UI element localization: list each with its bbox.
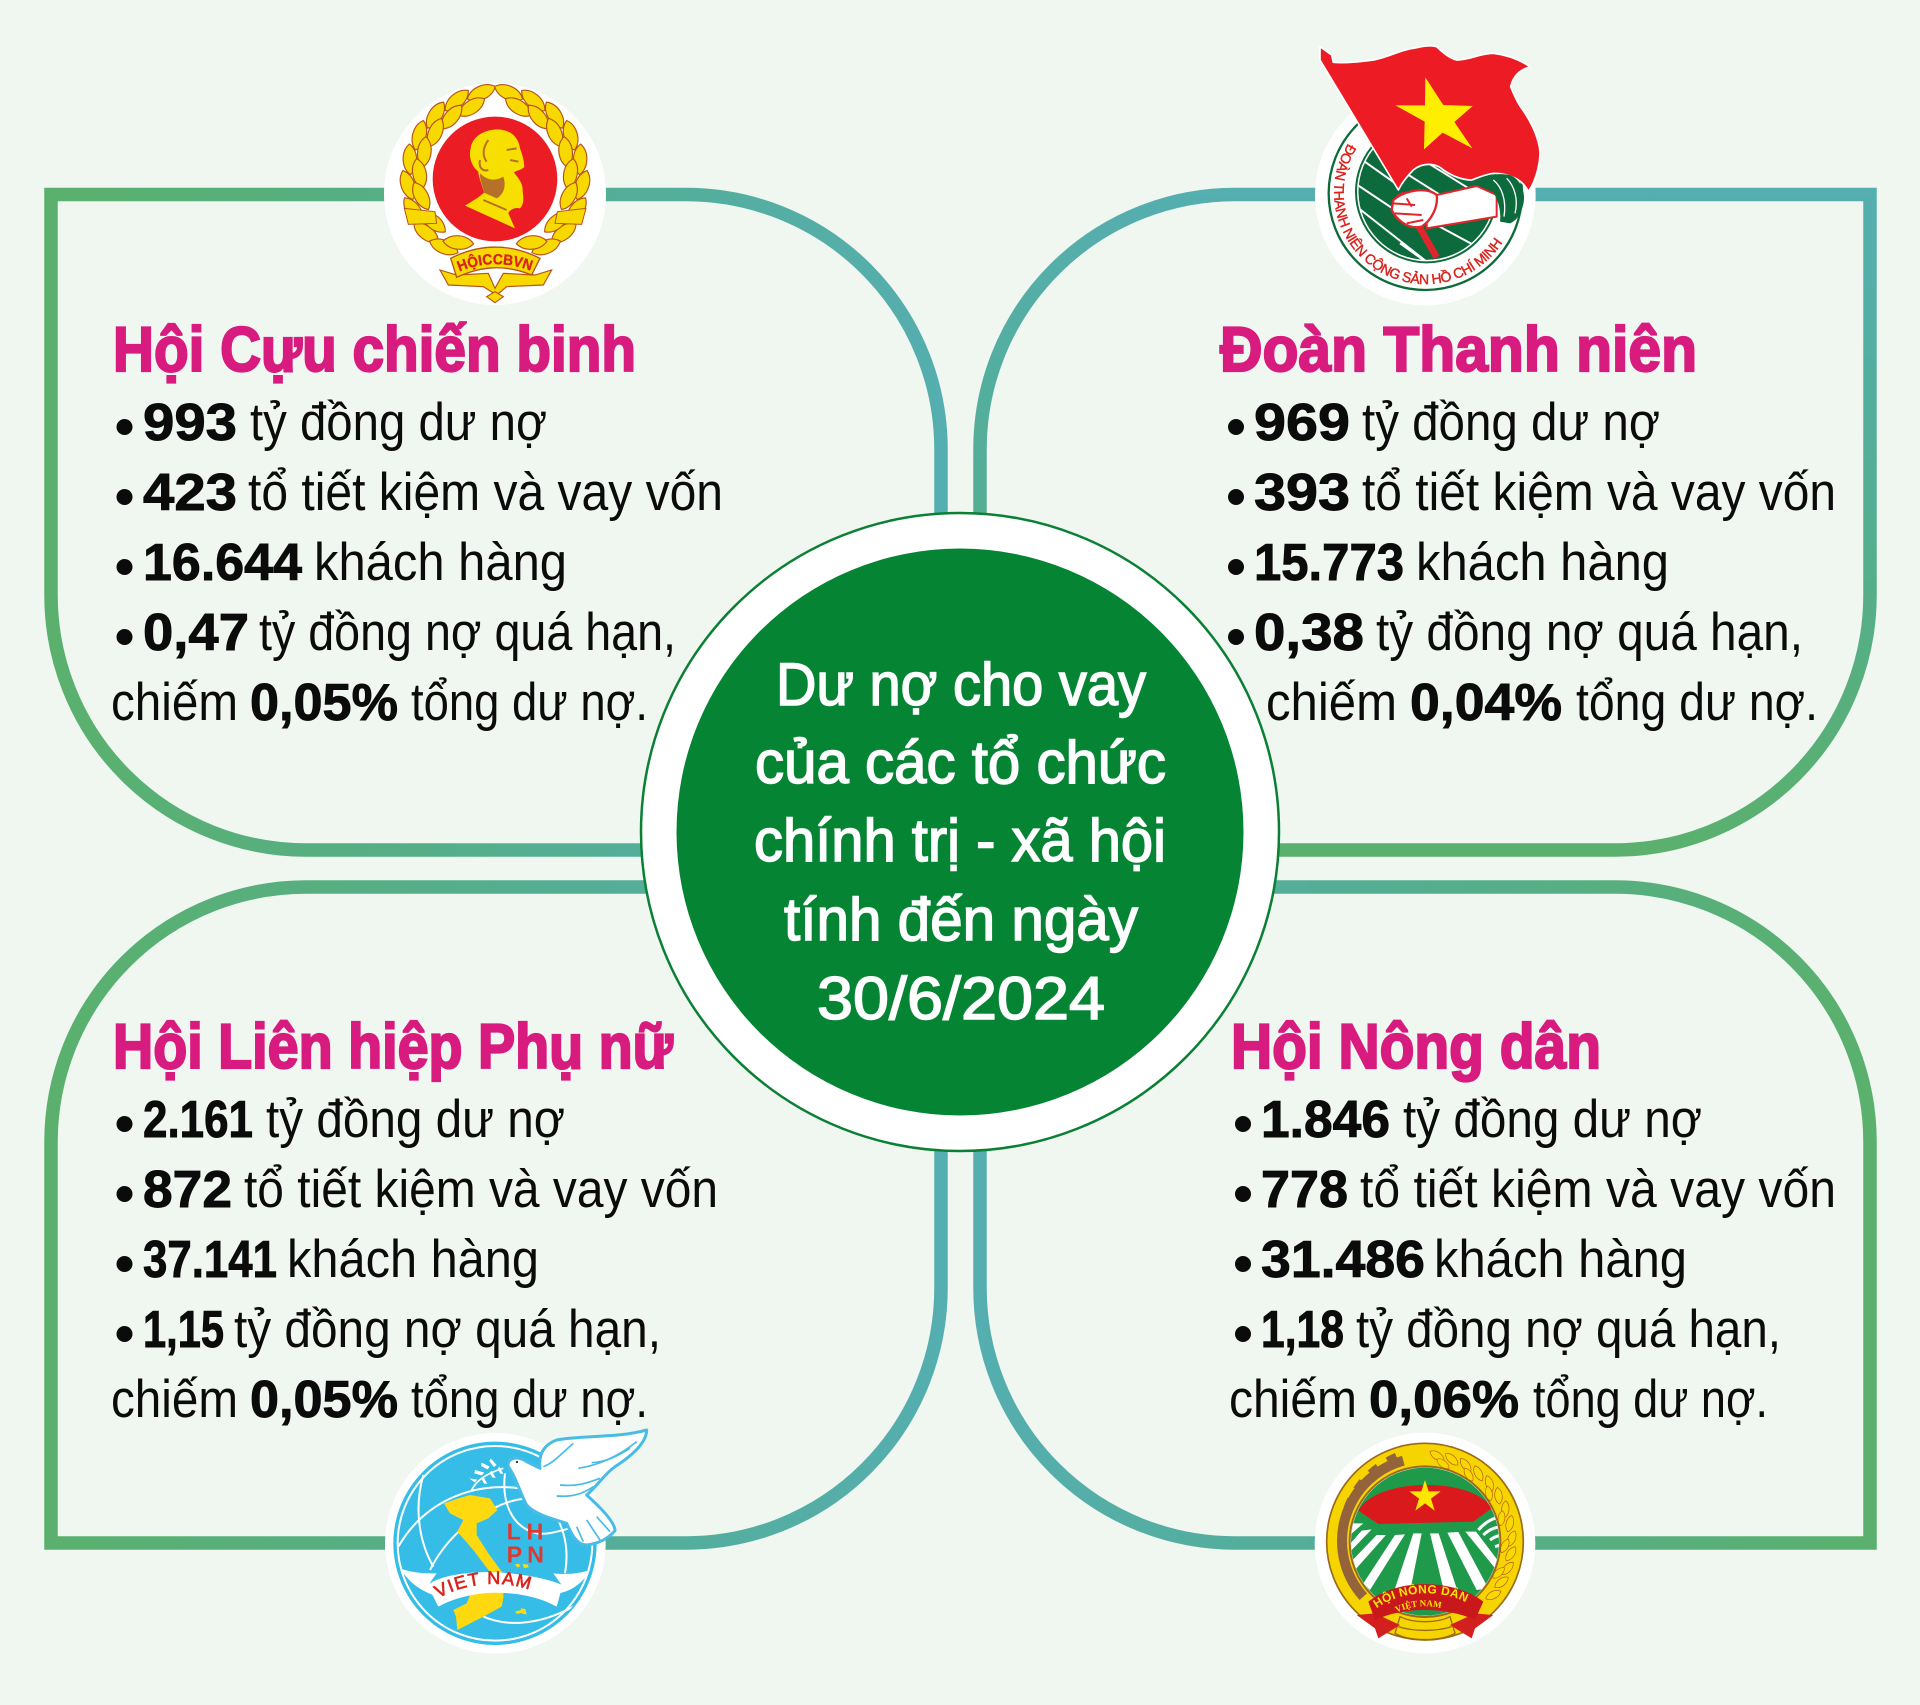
stats list: Hội Nông dân: chiếm xyxy=(1229,1370,1357,1429)
panel: Hội Nông dân xyxy=(973,880,1877,1654)
icon: farmers union emblem: HỘI NÔNG DÂN xyxy=(1372,1584,1468,1608)
stats list: Hội Nông dân: khách hàng xyxy=(1434,1230,1687,1289)
stats list: Hội Liên hiệp Phụ nữ: 2.161 xyxy=(143,1091,253,1149)
stats list: Hội Nông dân: 31.486 xyxy=(1261,1231,1425,1289)
stats list: Hội Liên hiệp Phụ nữ: chiếm xyxy=(111,1370,238,1429)
stats list: Đoàn Thanh niên: tỷ đồng dư nợ xyxy=(1362,393,1660,452)
title text: tính đến ngày xyxy=(784,886,1138,953)
title text: của các tổ chức xyxy=(755,729,1166,796)
stats list: Hội Nông dân: tỷ đồng nợ quá hạn, xyxy=(1356,1300,1781,1359)
stats list: Hội Cựu chiến binh: 0,47 xyxy=(143,604,249,662)
panel: Hội Cựu chiến binh xyxy=(44,83,948,857)
icon: women's union emblem with dove xyxy=(385,1428,648,1654)
stats list: Đoàn Thanh niên: 969 xyxy=(1254,394,1350,452)
stats list: Đoàn Thanh niên xyxy=(1228,393,1836,732)
stats list: Đoàn Thanh niên: tổng dư nợ. xyxy=(1576,673,1818,732)
stats list: Hội Cựu chiến binh: tổng dư nợ. xyxy=(411,673,648,732)
stats list: Đoàn Thanh niên: chiếm xyxy=(1266,673,1397,732)
title text: chính trị - xã hội xyxy=(754,807,1166,874)
stats list: Hội Liên hiệp Phụ nữ: 1,15 xyxy=(143,1301,224,1359)
stats list: Hội Cựu chiến binh: khách hàng xyxy=(314,533,567,592)
stats list: Hội Nông dân: 778 xyxy=(1261,1161,1348,1219)
stats list: Hội Liên hiệp Phụ nữ: 37.141 xyxy=(143,1231,277,1289)
stats list: Hội Nông dân: tỷ đồng dư nợ xyxy=(1403,1090,1702,1149)
stats list: Hội Cựu chiến binh: chiếm xyxy=(111,673,238,732)
stats list: Hội Cựu chiến binh: 16.644 xyxy=(143,534,302,592)
stats list: Đoàn Thanh niên: 15.773 xyxy=(1254,534,1404,592)
stats list: Hội Cựu chiến binh: 993 xyxy=(143,394,237,452)
stats list: Hội Cựu chiến binh: tỷ đồng dư nợ xyxy=(250,393,547,452)
stats list: Hội Nông dân xyxy=(1229,1090,1836,1429)
stats list: Hội Cựu chiến binh: 423 xyxy=(143,464,237,522)
stats list: Hội Liên hiệp Phụ nữ: tổ tiết kiệm và vay vốn xyxy=(244,1160,718,1219)
stats list: Đoàn Thanh niên: 393 xyxy=(1254,464,1350,522)
stats list: Đoàn Thanh niên: tổ tiết kiệm và vay vốn xyxy=(1362,463,1836,522)
stats list: Hội Cựu chiến binh: 0,05% xyxy=(250,674,398,732)
stats list: Hội Liên hiệp Phụ nữ: tổng dư nợ. xyxy=(411,1370,648,1429)
title text: 30/6/2024 xyxy=(817,965,1105,1032)
stats list: Hội Liên hiệp Phụ nữ xyxy=(111,1090,718,1429)
stats list: Hội Nông dân: tổ tiết kiệm và vay vốn xyxy=(1360,1160,1836,1219)
icon: women's union emblem with dove: VIET NAM xyxy=(432,1571,532,1596)
stats list: Hội Nông dân: 0,06% xyxy=(1369,1371,1519,1429)
stats list: Hội Liên hiệp Phụ nữ: tỷ đồng dư nợ xyxy=(266,1090,565,1149)
stats list: Hội Nông dân: 1,18 xyxy=(1261,1301,1344,1359)
stats list: Đoàn Thanh niên: 0,38 xyxy=(1254,604,1364,662)
stats list: Hội Cựu chiến binh: tổ tiết kiệm và vay vốn xyxy=(248,463,723,522)
stats list: Hội Nông dân: 1.846 xyxy=(1261,1091,1390,1149)
stats list: Hội Nông dân: tổng dư nợ. xyxy=(1533,1370,1768,1429)
panel: Đoàn Thanh niên xyxy=(973,45,1877,857)
stats list: Đoàn Thanh niên: khách hàng xyxy=(1416,533,1669,592)
stats list: Hội Liên hiệp Phụ nữ: khách hàng xyxy=(287,1230,539,1289)
heading: Hội Nông dân: Hội Nông dân xyxy=(1231,1012,1601,1082)
stats list: Hội Cựu chiến binh: tỷ đồng nợ quá hạn, xyxy=(259,603,676,662)
stats list: Đoàn Thanh niên: 0,04% xyxy=(1410,674,1562,732)
stats list: Hội Liên hiệp Phụ nữ: 872 xyxy=(143,1161,232,1219)
icon: youth union emblem with flag: ĐOÀN THANH NIÊN CỘNG SẢN HỒ CHÍ MINH xyxy=(1334,144,1502,284)
stats list: Đoàn Thanh niên: tỷ đồng nợ quá hạn, xyxy=(1376,603,1803,662)
heading: Hội Liên hiệp Phụ nữ: Hội Liên hiệp Phụ nữ xyxy=(113,1012,673,1082)
icon: veterans association emblem xyxy=(384,83,606,305)
title text: Dư nợ cho vay xyxy=(776,651,1146,718)
stats list: Hội Liên hiệp Phụ nữ: 0,05% xyxy=(250,1371,398,1429)
stats list: Hội Liên hiệp Phụ nữ: tỷ đồng nợ quá hạn, xyxy=(234,1300,661,1359)
icon: veterans association emblem: HỘICCBVN xyxy=(456,254,534,272)
icon: youth union emblem with flag xyxy=(1315,45,1540,306)
heading: Hội Cựu chiến binh: Hội Cựu chiến binh xyxy=(113,315,636,385)
icon: farmers union emblem: VIỆT NAM xyxy=(1394,1600,1442,1612)
title text xyxy=(754,651,1166,1032)
icon: farmers union emblem xyxy=(1314,1432,1536,1654)
stats list: Hội Cựu chiến binh xyxy=(111,393,723,732)
heading: Đoàn Thanh niên: Đoàn Thanh niên xyxy=(1220,315,1697,385)
icon: women's union emblem with dove: P N xyxy=(507,1542,544,1568)
icon: women's union emblem with dove: L H xyxy=(507,1518,543,1544)
panel: Hội Liên hiệp Phụ nữ xyxy=(44,880,948,1654)
center circle: title badge xyxy=(641,513,1279,1151)
